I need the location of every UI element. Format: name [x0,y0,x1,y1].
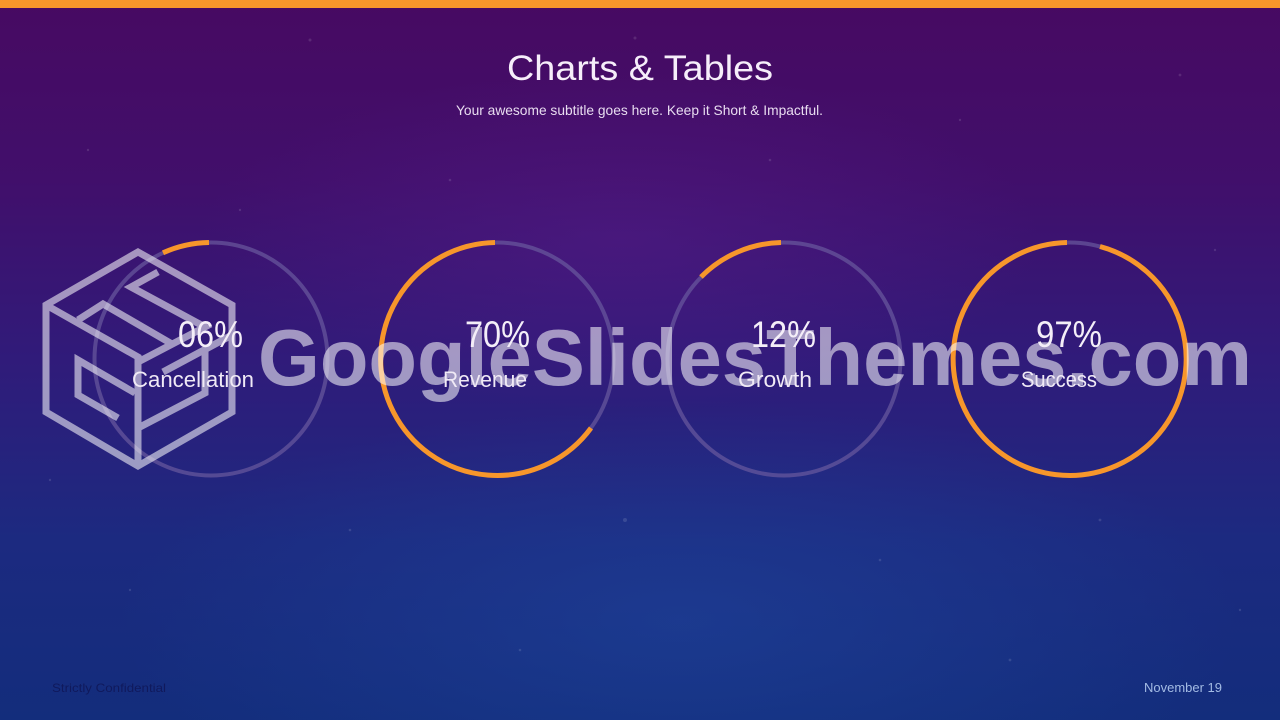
label: success 97% [1021,314,1102,392]
label: growth 12%: Growth [738,367,812,392]
title: Charts & Tables [507,49,773,88]
label: growth 12% [738,314,816,392]
label: revenue 70%: 70% [465,314,530,355]
label: growth 12%: 12% [751,314,816,355]
subtitle: Your awesome subtitle goes here. Keep it Short & Impactful. [456,102,823,118]
footer: date: November 19 [1144,681,1222,695]
footer: confidentiality note: Strictly Confidential [52,681,166,695]
top accent bar [0,0,1280,8]
ring: success 97% [953,242,1186,476]
ring: growth 12% [668,242,900,476]
watermark text: GoogleSlidesThemes.com [258,313,1252,402]
label: cancellation 06%: 06% [178,314,243,355]
label: cancellation 06%: Cancellation [132,367,254,392]
ring: revenue 70% [380,242,614,476]
label: success 97%: Success [1021,367,1097,392]
label: revenue 70%: Revenue [443,367,527,392]
icon: watermark cube logo [46,252,232,466]
ring: cancellation 06% [94,242,328,476]
label: cancellation 06% [132,314,254,392]
label: success 97%: 97% [1036,314,1102,355]
label: revenue 70% [443,314,530,392]
